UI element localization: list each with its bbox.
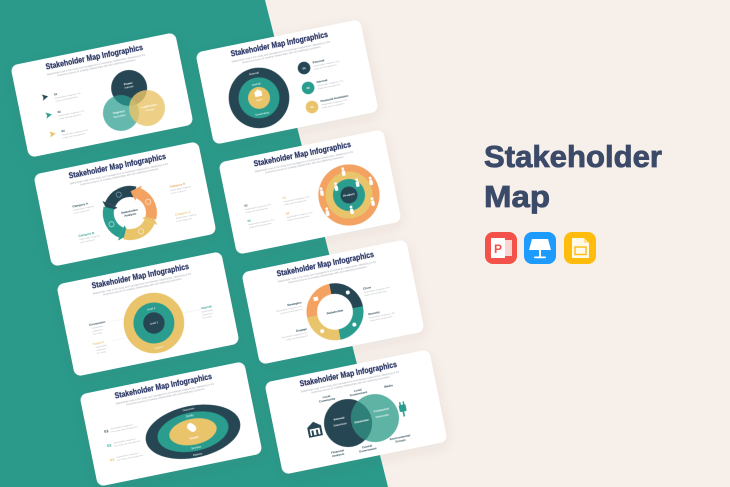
main title: Map <box>484 179 550 214</box>
concentric circles: Internal <box>252 81 261 87</box>
overlapping circles: Stakeholder <box>333 421 347 428</box>
icon: Keynote <box>524 232 556 264</box>
stakeholder labels: Community <box>319 396 336 404</box>
legend 03 <box>282 191 311 206</box>
connection label: the study <box>93 331 103 336</box>
legend 01: Stakeholder mapping is the <box>313 60 340 68</box>
legend 04: Stakeholder mapping is the <box>286 211 314 219</box>
legend 02: Internal <box>316 78 328 84</box>
yellow label: Support <box>92 340 105 346</box>
stakeholder labels: Analysts <box>332 452 345 458</box>
close label: Stakeholder mapping is the <box>363 286 391 294</box>
category C label: is the study and <box>171 189 187 195</box>
yellow label: the study <box>97 350 107 355</box>
card: product onion with people <box>218 129 402 255</box>
card: venn diagram <box>10 32 194 158</box>
card title: Stakeholder Map Infographics <box>91 262 190 291</box>
legend 02: study and management <box>59 113 82 121</box>
level circles: Level 3 <box>154 345 164 350</box>
card subtitle: Stakeholder map is the study and management of exchange relationships. Marketing is the <box>46 54 146 77</box>
legend 03: 03 <box>310 105 314 109</box>
nested ellipses: Outcomes <box>182 406 195 412</box>
legend 03: study and management <box>63 132 86 140</box>
category B label: Stakeholder mapping <box>79 234 101 241</box>
nested ellipses: Patients <box>193 451 203 457</box>
card subtitle: business process of creating relationships with and satisfying customers <box>265 155 345 174</box>
venn circles: Primary <box>145 107 155 113</box>
yellow label: Stakeholder <box>95 344 108 349</box>
stakeholder labels: Environmental <box>389 433 411 441</box>
stakeholder labels: Media <box>384 383 393 389</box>
icon: PowerPoint <box>485 232 517 264</box>
card: donut chart <box>241 239 425 365</box>
card subtitle: business process of creating relationships with and satisfying customers <box>288 265 368 284</box>
legend 03 <box>305 93 350 114</box>
legend 02: 02 <box>107 442 113 448</box>
level circles: Level 2 <box>147 306 156 312</box>
card title: Stakeholder Map Infographics <box>299 360 398 389</box>
card subtitle: Stakeholder map is the study and management of exchange relationships. Marketing is the <box>277 261 377 284</box>
card: health ellipses <box>79 361 263 487</box>
category A label <box>72 200 95 215</box>
teal background panel <box>0 0 388 487</box>
venn circles <box>95 64 168 135</box>
level circles <box>118 287 190 359</box>
legend 02: study and management <box>249 222 272 229</box>
concentric circles: Governance <box>255 110 270 117</box>
category B label <box>78 230 101 244</box>
overlapping circles: Internal <box>333 415 345 422</box>
security label <box>368 307 397 323</box>
yellow label <box>92 339 109 355</box>
card: levels circle <box>56 251 240 377</box>
legend 04: study and management <box>287 215 310 222</box>
connection label: Stakeholder <box>91 325 104 330</box>
engage label <box>280 327 309 342</box>
card title: Stakeholder Map Infographics <box>253 140 352 169</box>
card subtitle: business process of creating relationships with and satisfying customers <box>126 387 206 406</box>
main title: Stakeholder <box>484 139 662 174</box>
venn circles: Urgency <box>112 109 125 115</box>
legend 01: Stakeholder mapping is the <box>245 203 272 211</box>
connection label: Connection <box>89 320 106 327</box>
legend 02: Stakeholder mapping is <box>113 437 137 445</box>
category A label: Stakeholder mapping <box>73 205 95 212</box>
engage label: Stakeholder mapping is the <box>281 331 309 339</box>
concentric circles: Bank <box>256 97 263 102</box>
legend 01 <box>42 87 82 105</box>
category C label: Stakeholder mapping <box>170 185 192 192</box>
legend 03: Stakeholder mapping is the <box>321 98 348 107</box>
concentric circles: External <box>249 70 259 76</box>
legend 01 <box>244 199 273 214</box>
category C label <box>169 181 192 195</box>
card subtitle: Stakeholder map is the study and management of exchange relationships. Marketing is the <box>300 371 400 394</box>
stakeholder labels: Groups <box>395 438 407 444</box>
internal label <box>201 304 215 320</box>
category A label: Category A <box>72 201 89 208</box>
legend 02: 02 <box>57 110 62 114</box>
cycle ring: Stakeholder <box>121 207 139 215</box>
cycle ring: Analysis <box>124 211 137 218</box>
legend 01: 01 <box>244 203 248 208</box>
card subtitle: business process of creating relationships with and satisfying customers <box>57 58 137 77</box>
legend 03: study and management <box>322 102 345 110</box>
legend 01 <box>104 422 138 435</box>
venn circles: Internal <box>124 84 134 90</box>
close label: study and management <box>364 290 387 297</box>
icon: PowerPoint: P <box>494 242 502 256</box>
card: two-circle venn with icons <box>264 349 448 475</box>
venn circles: Power <box>123 81 134 86</box>
stakeholder labels: Local <box>353 387 362 393</box>
category C label: Category D <box>169 181 186 189</box>
level circles: Level 1 <box>149 320 159 326</box>
concentric circles <box>223 62 295 134</box>
category A label: is the study and <box>74 209 90 215</box>
card subtitle: Stakeholder map is the study and management of exchange relationships. Marketing is the <box>92 273 192 296</box>
card subtitle: business process of creating relationships with and satisfying customers <box>103 277 183 296</box>
category D label: is the study and <box>176 217 193 223</box>
legend 01: 01 <box>54 92 58 97</box>
internal label: Internal <box>201 304 212 310</box>
icon: plug <box>398 401 408 417</box>
overlapping circles <box>320 389 403 452</box>
venn circles: Legitimacy <box>141 102 157 109</box>
yellow label: mapping is <box>96 348 108 352</box>
internal label: mapping is <box>202 312 214 317</box>
engage label: Engage <box>296 327 308 333</box>
close label <box>363 281 391 297</box>
legend 03: Stakeholder mapping is the <box>62 128 89 137</box>
overlapping circles: Stakeholder <box>354 418 369 425</box>
stakeholder labels: Government <box>359 446 377 454</box>
legend 01: 01 <box>302 66 306 70</box>
legend 01: the study and management <box>111 425 138 434</box>
category B label: is the study and <box>80 238 96 244</box>
legend 01: study and management <box>55 95 78 103</box>
close label: Close <box>363 285 372 291</box>
security label: Security <box>368 310 380 316</box>
legend 03: 03 <box>282 195 287 200</box>
legend 02: Stakeholder mapping is the <box>317 79 344 87</box>
connector lines <box>109 304 203 341</box>
legend 03: Stakeholder mapping is <box>116 451 140 459</box>
cycle ring <box>94 177 166 249</box>
card subtitle: Stakeholder map is the study and management of exchange relationships. Marketing is the <box>231 41 331 64</box>
nested ellipses: Health <box>189 435 199 441</box>
category B label: Category B <box>78 231 95 238</box>
internal label: Stakeholder <box>201 308 214 314</box>
category D label: Category C <box>175 209 192 217</box>
legend 02: 02 <box>247 218 252 223</box>
legend 03: the study and management <box>117 454 144 462</box>
card subtitle: Stakeholder map is the study and management of exchange relationships. Marketing is the <box>254 151 354 174</box>
card subtitle: business process of creating relationships with and satisfying customers <box>80 167 160 186</box>
donut: Stakeholder <box>326 308 345 315</box>
legend 01 <box>297 55 341 75</box>
onion rings: Product <box>343 192 355 198</box>
legend 02: Stakeholder mapping is the <box>58 109 85 118</box>
legend 02 <box>45 105 86 123</box>
strategies label: Stakeholder mapping is the <box>276 305 303 313</box>
card title: Stakeholder Map Infographics <box>276 250 375 279</box>
security label: study and management <box>369 315 393 323</box>
main title <box>484 139 662 214</box>
card subtitle: Stakeholder map is the study and management of exchange relationships. Marketing is the <box>115 383 215 406</box>
strategies label <box>275 300 304 316</box>
stakeholder labels: Government <box>349 390 367 397</box>
card subtitle: business process of creating relationships with and satisfying customers <box>242 45 322 64</box>
nested ellipses <box>141 397 245 467</box>
stakeholder labels: Local <box>322 394 331 399</box>
nested ellipses: Services <box>191 444 202 450</box>
legend 02: Stakeholder mapping is the <box>248 218 275 226</box>
card title: Stakeholder Map Infographics <box>114 372 213 401</box>
icon: Google Slides <box>564 232 596 264</box>
card: cycle arrows <box>33 141 217 267</box>
stakeholder labels: Financial <box>331 448 344 455</box>
connection label: mapping is <box>92 329 104 333</box>
legend 03: Financial Institution <box>320 94 349 103</box>
card title: Stakeholder Map Infographics <box>45 43 144 72</box>
card subtitle: Stakeholder map is the study and management of exchange relationships. Marketing is the <box>69 163 169 186</box>
internal label: the study <box>203 315 213 320</box>
donut <box>308 284 362 339</box>
legend 02 <box>247 214 276 229</box>
connection label <box>89 320 108 336</box>
card: concentric bank circle <box>195 19 379 145</box>
legend 03: 03 <box>109 456 116 462</box>
legend 03: Stakeholder mapping is the <box>283 195 311 203</box>
legend 01: 01 <box>104 428 110 434</box>
category D label <box>175 208 198 223</box>
legend 03: 03 <box>61 129 65 133</box>
legend 01: External <box>312 58 325 64</box>
nested ellipses: Quality <box>185 413 195 418</box>
legend 03 <box>49 124 90 142</box>
legend 04: 04 <box>285 211 290 216</box>
card subtitle: business process of creating relationships with and satisfying customers <box>311 375 391 394</box>
legend 01: study and management <box>246 207 269 214</box>
card title: Stakeholder Map Infographics <box>230 30 329 59</box>
legend 03: study and management <box>284 199 307 206</box>
legend 01: Stakeholder mapping is the <box>54 92 82 100</box>
legend 02 <box>301 74 345 95</box>
engage label: study and management <box>285 334 309 342</box>
strategies label: study and management <box>280 308 303 315</box>
stakeholder labels <box>318 380 412 459</box>
category D label: Stakeholder mapping <box>176 213 197 220</box>
icon: warehouse <box>306 420 323 438</box>
legend 02: study and management <box>318 83 341 90</box>
venn circles: Secondary <box>113 113 127 119</box>
overlapping circles: Stakeholder <box>375 412 390 419</box>
legend 01: Stakeholder mapping is <box>111 423 134 431</box>
legend 01: study and management <box>314 63 337 71</box>
card title: Stakeholder Map Infographics <box>68 152 167 181</box>
legend 02 <box>107 436 141 449</box>
overlapping circles: Connected <box>373 406 389 413</box>
legend 03 <box>109 451 144 463</box>
strategies label: Strategies <box>287 300 302 307</box>
legend 02: the study and management <box>114 439 141 448</box>
onion rings <box>313 159 385 231</box>
legend 02: 02 <box>306 86 310 90</box>
legend 04 <box>285 207 314 222</box>
security label: Stakeholder mapping is the <box>369 311 396 320</box>
stakeholder labels: Central <box>362 443 373 449</box>
